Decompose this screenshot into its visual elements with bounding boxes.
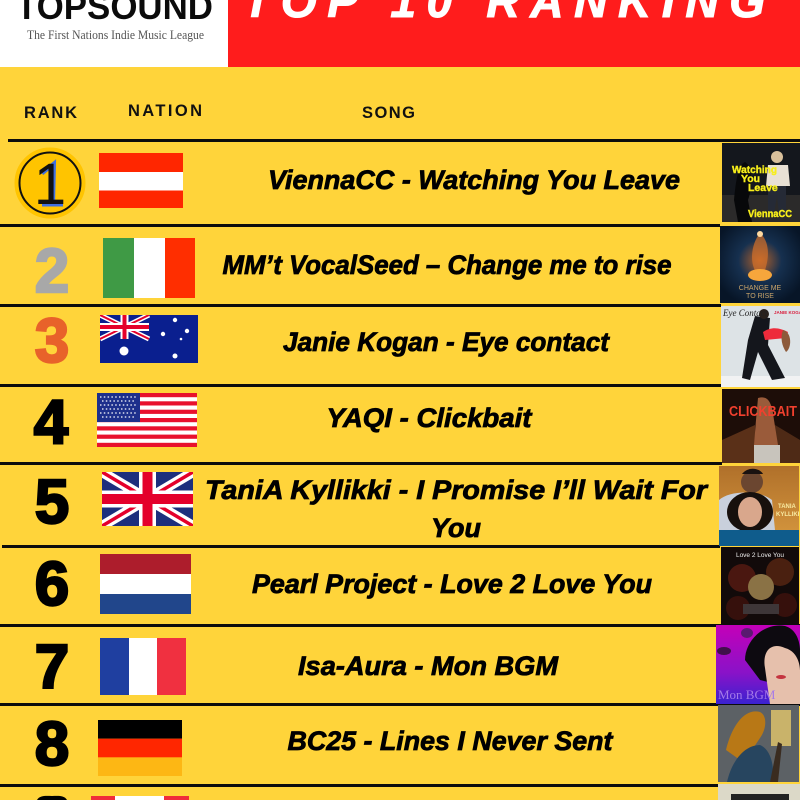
song 3: Janie Kogan - Eye contact [283, 327, 610, 357]
rank 8: 8 [35, 710, 69, 779]
header logo panel [0, 0, 228, 67]
cover art 5 [719, 466, 800, 546]
row 6 [35, 547, 799, 624]
rank 6: 6 [35, 550, 69, 619]
cover art 2: TO RISE [746, 293, 774, 300]
cover art 1 [722, 143, 800, 222]
song 4: YAQI - Clickbait [326, 403, 533, 433]
song 7: Isa-Aura - Mon BGM [298, 651, 558, 681]
cover art 9 [718, 784, 800, 800]
logo tagline: The First Nations Indie Music League [27, 28, 204, 42]
cover art 8 [718, 705, 799, 782]
song 1: ViennaCC - Watching You Leave [268, 165, 680, 195]
rank 7: 7 [35, 633, 69, 702]
flag: Austria [99, 153, 183, 208]
cover art 2: CHANGE ME [739, 285, 782, 292]
row 9 [37, 784, 800, 800]
rank badge 1: 1 [34, 152, 66, 217]
cover art 1: ViennaCC [748, 208, 792, 220]
cover art 4 [722, 389, 800, 463]
column heading: nation: NATION [128, 102, 202, 120]
rank badge 1 [16, 149, 84, 217]
flag: United Kingdom [102, 472, 193, 526]
cover art 7 [716, 625, 800, 704]
rank 2: 2 [35, 237, 69, 306]
song 5: You [431, 513, 481, 543]
row 5 [35, 466, 800, 546]
cover art 1: Watching [732, 164, 777, 176]
song 8: BC25 - Lines I Never Sent [288, 726, 613, 756]
row 2 [35, 226, 800, 306]
cover art 6: Love 2 Love You [736, 552, 784, 559]
flag: France [100, 638, 186, 695]
rank 3: 3 [35, 307, 69, 376]
flag: Italy [103, 238, 195, 298]
cover art 3: Eye Contact [722, 308, 768, 318]
cover art 2 [720, 226, 800, 303]
rank 4: 4 [34, 388, 69, 457]
song 5 [205, 475, 709, 543]
flag: Netherlands [100, 554, 191, 614]
row 3 [35, 306, 800, 387]
column heading: song: SONG [362, 104, 415, 122]
row 4 [34, 388, 800, 463]
cover art 6 [721, 547, 799, 624]
flag: partially visible [91, 796, 189, 800]
cover art 1: You [741, 173, 760, 185]
column heading: rank: RANK [24, 104, 77, 122]
rank 9 sliver, cropped by the page edge [37, 796, 67, 800]
flag: Germany [98, 720, 182, 776]
cover art 1: Leave [748, 182, 778, 194]
cover art 3 [721, 306, 800, 387]
row 1 [16, 143, 800, 222]
cover art 5: TANIA [778, 504, 797, 510]
song 2: MM’t VocalSeed – Change me to rise [222, 250, 672, 280]
song 6: Pearl Project - Love 2 Love You [252, 569, 653, 599]
flag: Australia [100, 315, 198, 363]
rank 5: 5 [35, 468, 69, 537]
song 5: TaniA Kyllikki - I Promise I’ll Wait For [205, 475, 709, 505]
flag: United States [97, 393, 197, 447]
title banner [228, 0, 800, 67]
row 7 [35, 625, 800, 704]
cover art 7: Mon BGM [718, 687, 776, 702]
row 8 [35, 705, 799, 782]
